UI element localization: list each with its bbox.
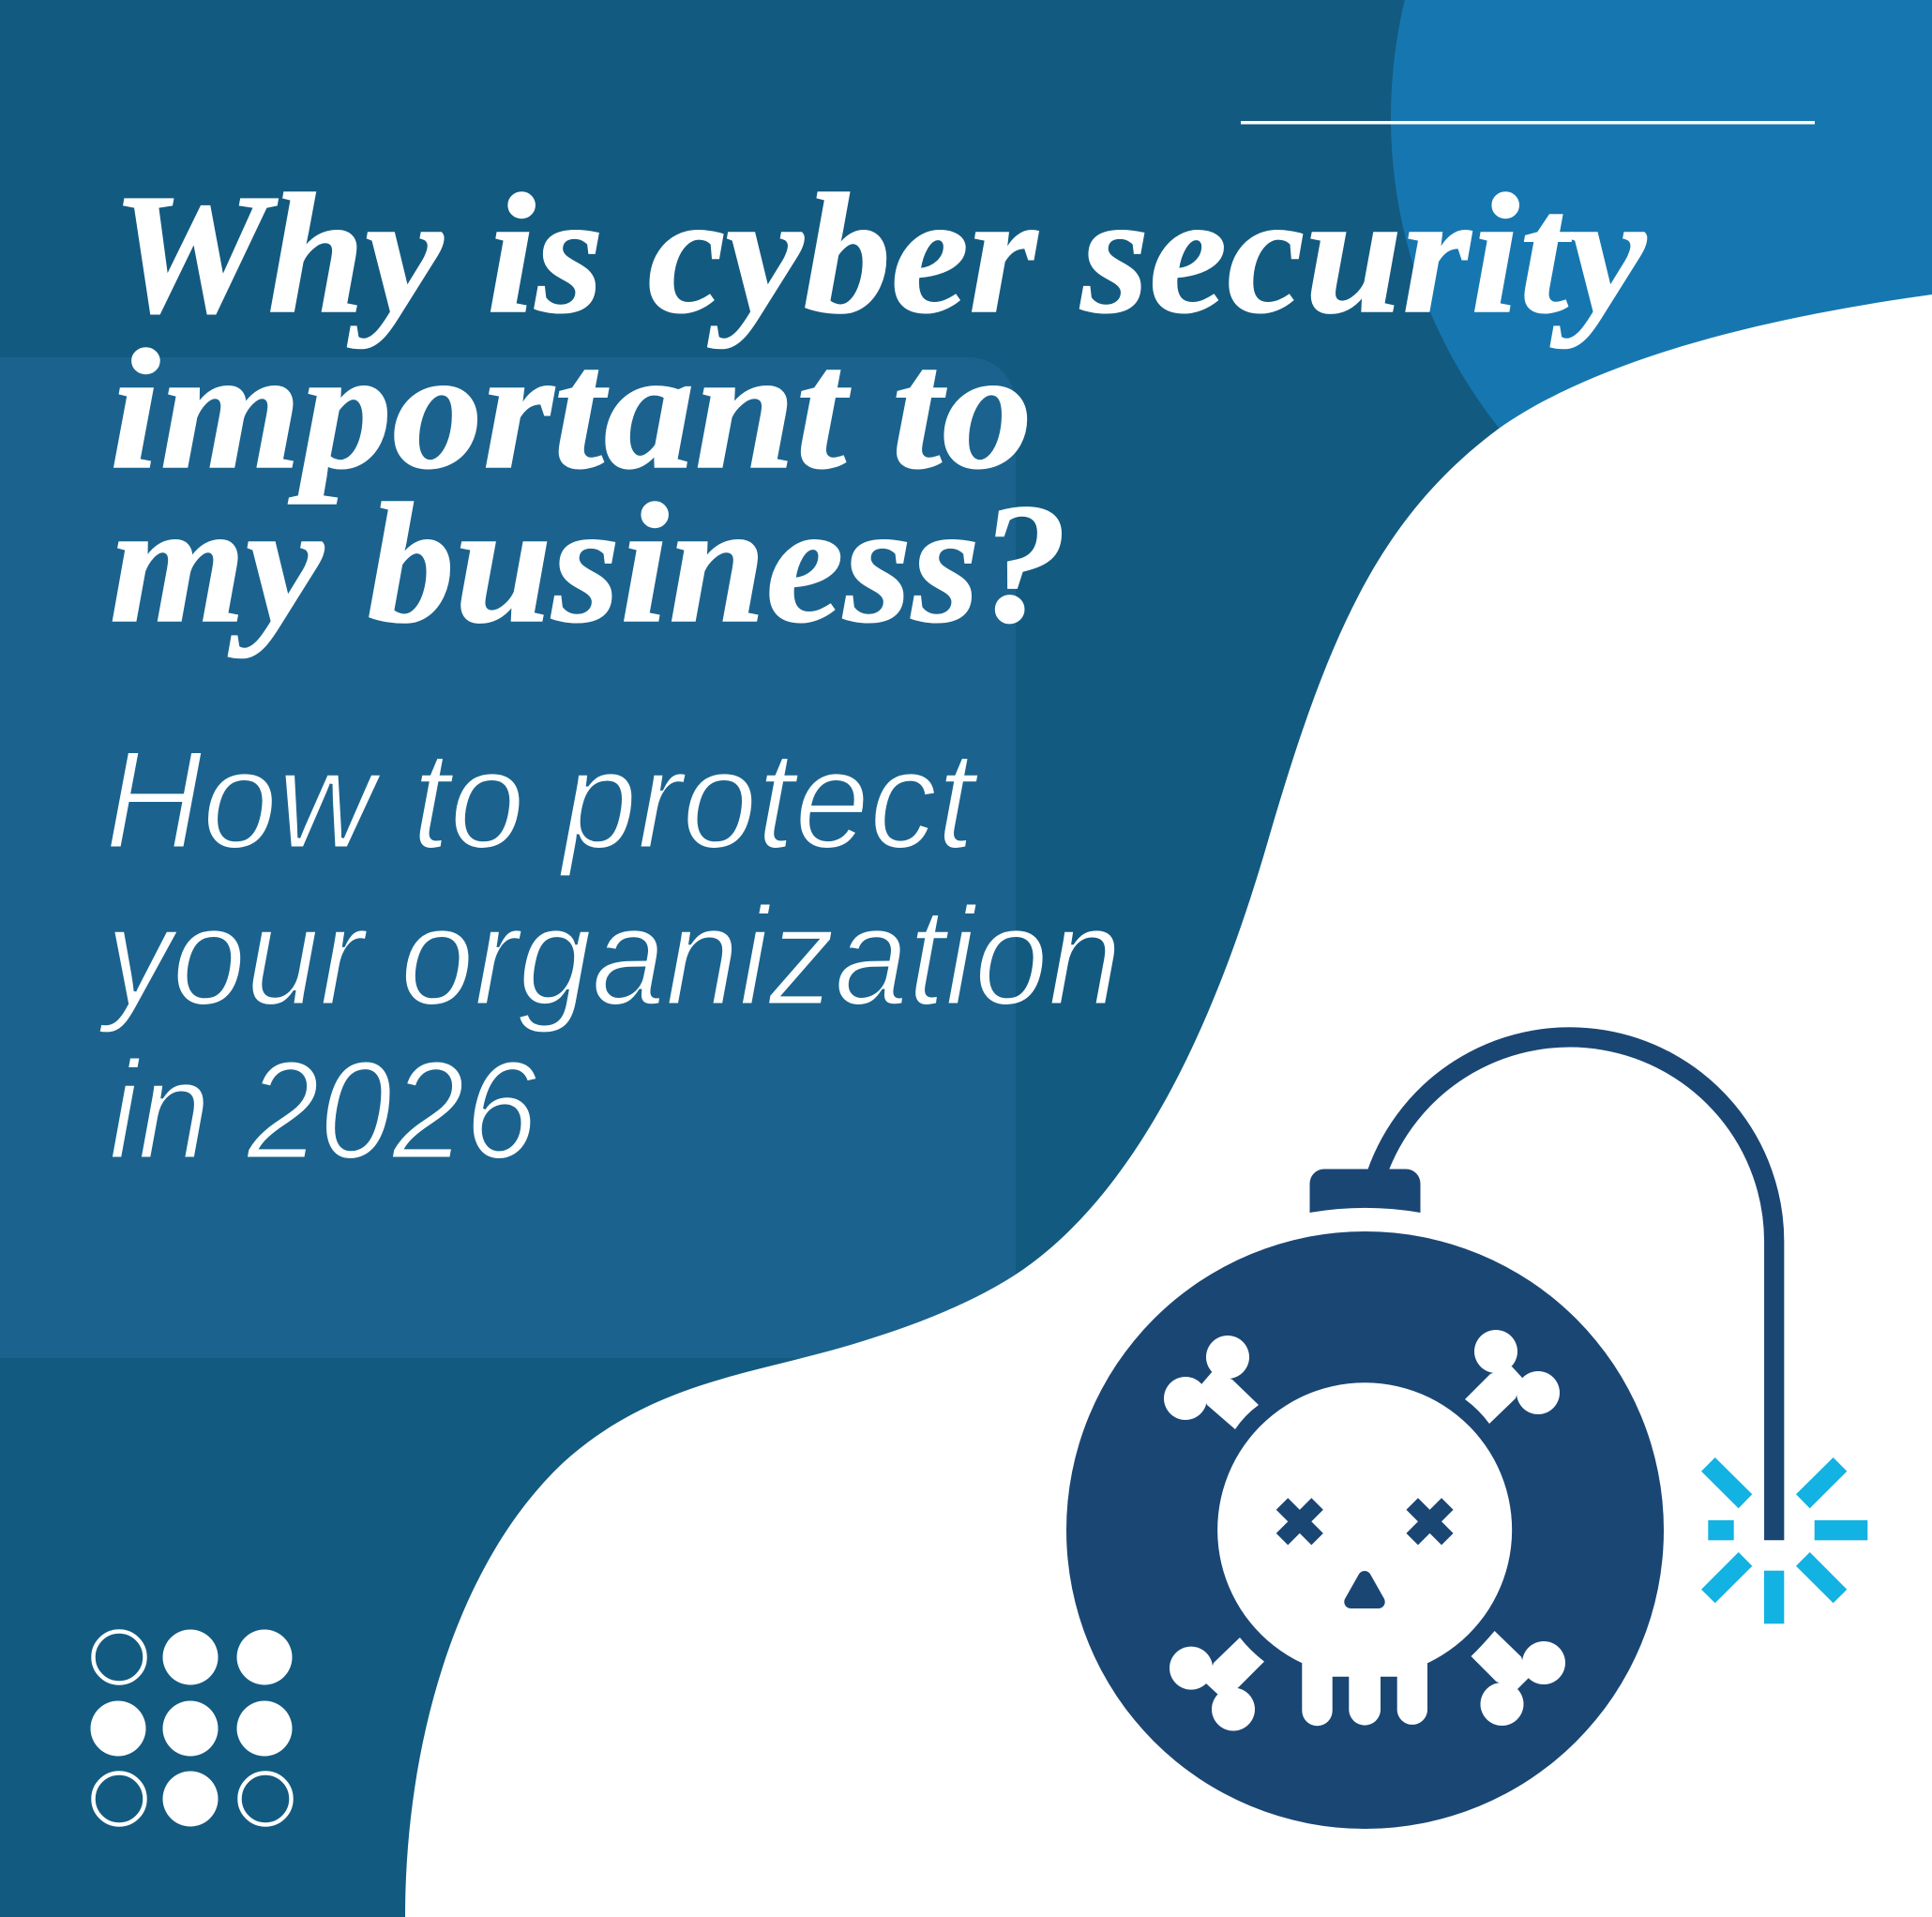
icon: dots logo xyxy=(90,1630,293,1827)
crossbone top left xyxy=(1164,1336,1259,1429)
fuse sparks xyxy=(1701,1457,1867,1623)
title: my business? xyxy=(110,468,1067,658)
crossbone bottom left xyxy=(1170,1638,1264,1731)
bomb fuse xyxy=(1377,1037,1774,1540)
bomb cap xyxy=(1309,1169,1420,1213)
crossbone bottom right xyxy=(1471,1631,1565,1726)
skull eyes xyxy=(1282,1504,1447,1539)
icon: skull bomb xyxy=(1066,1037,1867,1829)
subtitle: in 2026 xyxy=(109,1032,537,1188)
bomb body xyxy=(1066,1231,1664,1829)
subtitle xyxy=(98,721,1122,1188)
white wave area xyxy=(405,294,1932,1917)
title: important to xyxy=(110,314,1033,505)
skull nose xyxy=(1351,1577,1379,1602)
decorative circle top right xyxy=(1391,0,1932,618)
skull head and teeth xyxy=(1217,1382,1512,1726)
lighter text panel xyxy=(0,357,1016,1358)
title xyxy=(110,158,1647,658)
crossbone top right xyxy=(1465,1330,1560,1424)
title: Why is cyber security xyxy=(112,158,1647,349)
subtitle: your organization xyxy=(98,878,1122,1034)
top rule line xyxy=(1241,121,1815,124)
subtitle: How to protect xyxy=(105,721,979,878)
